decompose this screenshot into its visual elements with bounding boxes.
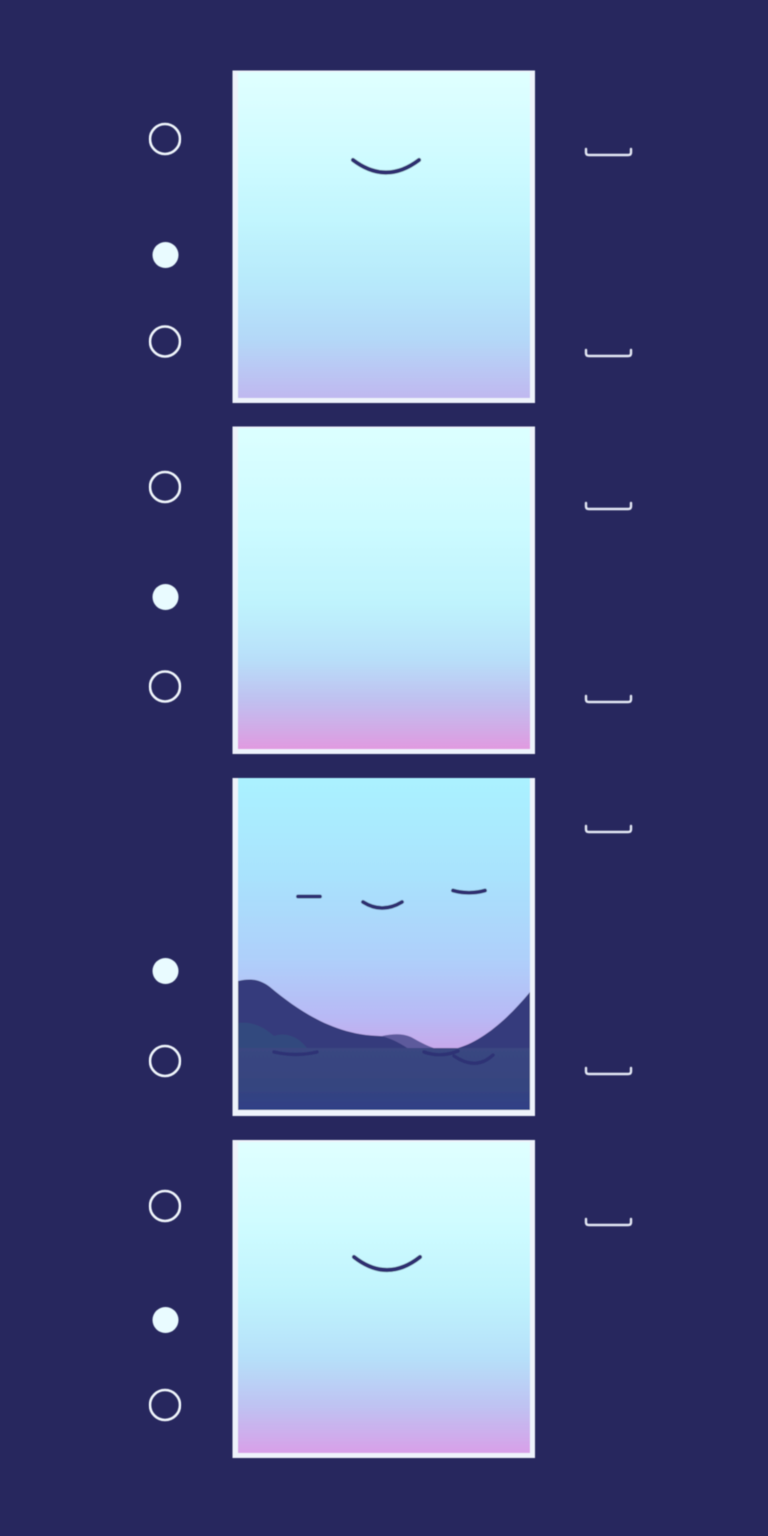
panel 4: smile on pink gradient (232, 1140, 535, 1458)
back hill (382, 1034, 442, 1052)
smile 1 (353, 160, 419, 172)
main hills (238, 979, 530, 1052)
left markers: rings and dots (150, 124, 180, 1420)
reflection right (454, 1055, 493, 1063)
panel 2 gradient fill (238, 428, 530, 749)
teal bush (238, 1023, 307, 1048)
reflection middle (424, 1051, 458, 1055)
reflection left (274, 1052, 317, 1054)
panel 1: smile on pale gradient (232, 70, 535, 403)
small smile middle (363, 902, 402, 908)
right markers: bracket ticks (586, 149, 631, 1225)
small smile right (453, 890, 485, 893)
small smile left (298, 895, 320, 898)
panel 2: pink horizon gradient (232, 426, 535, 754)
smile 4 (354, 1257, 420, 1270)
water (238, 1048, 530, 1110)
panel 3: landscape with hills and water (232, 778, 535, 1116)
